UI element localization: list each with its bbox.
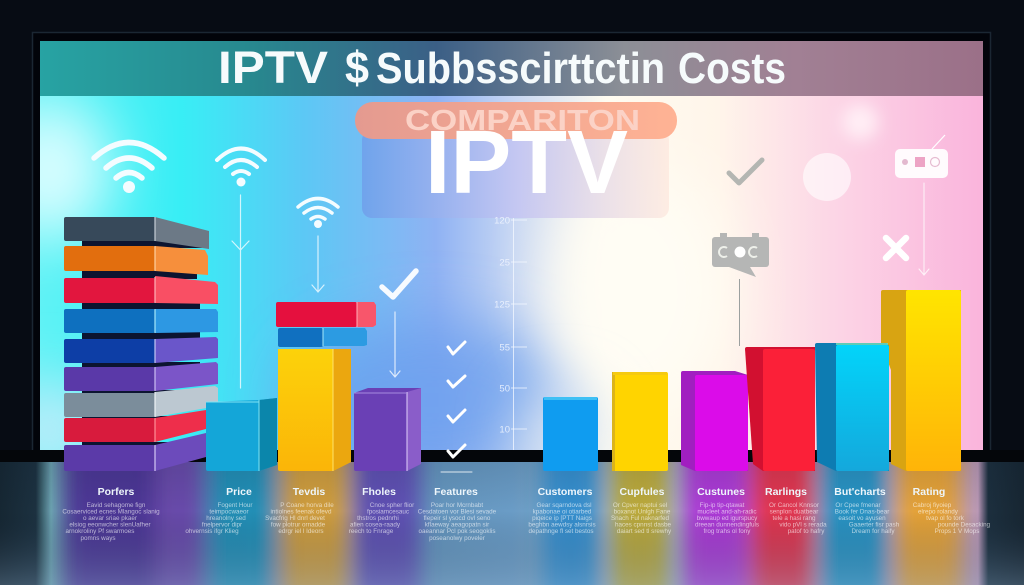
title bar [40, 41, 983, 96]
red slab [276, 302, 376, 327]
caption: Rating: Rating [913, 486, 945, 498]
caption: Fholes: reech to Fnrage [349, 528, 394, 535]
red bar: Ratings [745, 347, 815, 471]
yellow bar and stacked slabs: Trends [276, 302, 376, 471]
caption: Rating: Props 1 V Mops [935, 528, 979, 535]
caption: Custunes: Custunes [697, 486, 745, 498]
teal bar: Price [206, 398, 277, 471]
caption: Tevdis: intiolnes feenak ofevd [271, 508, 332, 516]
caption: Fholes: Fholes [362, 486, 396, 498]
caption: Rarlings [765, 486, 827, 535]
caption: Cupfules: haces cpnnst dasbe [615, 522, 672, 528]
caption: Customers: piqeice ip [PTT Naigs [532, 515, 592, 522]
caption: Butcharts: Gaaerter fisr pash [849, 522, 900, 528]
caption: Porfers: o aevar sriae pkaer [83, 515, 137, 522]
caption: Butcharts [834, 486, 900, 535]
caption: Features: Features [434, 486, 478, 498]
caption: Features: Poar hor Mcrnbabt [431, 502, 483, 509]
title text: Subbsscirttctin [376, 44, 665, 93]
check icon with arrow [382, 271, 416, 377]
value axis: 10 [499, 424, 510, 436]
caption: Tevdis: Svacfrig Hl dnrl devet [265, 515, 325, 522]
caption: Rarlings: Or Cancol Knnsor [769, 502, 819, 509]
slab 8 [64, 410, 206, 442]
caption: Rarlings: vido pVl s rerada [779, 522, 827, 528]
caption: Price: hreanolny sed [206, 515, 246, 522]
slab 3 [64, 276, 218, 304]
column captions [62, 486, 991, 542]
caption: Rating: elrepo rolandy [918, 508, 959, 516]
caption: Porfers: pomns ways [80, 535, 116, 542]
stacked slabs on the left [64, 217, 218, 471]
caption: Price [185, 486, 253, 535]
wifi icon small with arrow [298, 198, 338, 292]
caption: Fholes: fposiamcesauc [367, 508, 409, 516]
caption: Cupfules: Cupfules [620, 486, 665, 498]
caption: Customers: kpabonae oi otiarbed [533, 508, 592, 516]
caption: Rarlings: patof to hafry [788, 528, 825, 535]
checklist marks [441, 342, 472, 472]
wifi icon medium with arrow [217, 148, 265, 388]
slab 6 [64, 362, 218, 391]
IPTV big label: IPTV [425, 113, 628, 213]
caption: Rarlings: tele a hasi rang [772, 515, 816, 522]
caption: Price: fnelpervor dipr [202, 522, 242, 528]
slab 5 [64, 337, 218, 363]
comparison badge: COMPARITON [405, 105, 640, 137]
slab 7 [64, 386, 218, 417]
caption: Cupfules [611, 486, 672, 535]
caption: Features: poseanolwy poveler [429, 535, 485, 542]
caption: Cupfules: Snach Ful naknarfed [611, 515, 670, 522]
grey check icon [729, 160, 762, 183]
caption: Features: Cesdatoen vor Blesi sevade [418, 508, 497, 516]
caption: Fholes: thstros pednrhi [357, 515, 399, 522]
caption: Fholes [349, 486, 414, 535]
caption: Fholes: afien cosea-raady [350, 522, 401, 528]
value axis: 125 [494, 300, 510, 310]
caption: Cupfules: daiart sed tl srewhy [617, 528, 672, 535]
caption: Price: ohvernsis ifgr Klieg [185, 528, 239, 535]
value axis: 55 [499, 342, 510, 354]
caption: Rating [913, 486, 991, 535]
caption: Cupfules: Or Cpver naptui sel [613, 502, 667, 509]
slab 2 [64, 246, 208, 275]
wifi icon large [94, 142, 164, 193]
caption: Features: kflaeway aeagopatn sir [425, 522, 489, 528]
caption: Custunes: Fip-ip tip-qtawat [700, 502, 745, 509]
caption: Custunes: dreean dunnendingfuls [695, 522, 759, 528]
blue slab [278, 328, 367, 347]
caption: Rating: Cabroj fiyoiep [913, 502, 952, 509]
caption: Features: oaeannar Pcl pok seogoklis [418, 528, 496, 535]
caption: Rating: pounde Desacking [938, 522, 991, 528]
caption: Tevdis [265, 486, 334, 535]
comparison badge [355, 102, 677, 218]
caption: Features: flepeir sl ysocd ovl seno [424, 515, 491, 522]
caption: Customers: Gear sqarndova dsl [537, 502, 591, 509]
caption: Custunes [695, 486, 759, 535]
purple bar: Phones [354, 388, 421, 471]
caption: Tevdis: Tevdis [293, 486, 325, 498]
pale circle [803, 153, 851, 201]
caption: Customers: depathnge fl set bestos [528, 528, 594, 535]
caption: Rarlings: senplon duatbear [770, 508, 818, 516]
cyan bar: Butcharts [815, 343, 889, 471]
caption: Porfers: arnokroliny Pf swarmoes [66, 528, 134, 535]
yellow bar: Cupfules [612, 372, 668, 471]
screen gradient background [40, 96, 983, 450]
title text: $ [345, 42, 369, 93]
screen frame [32, 32, 990, 460]
caption: Porfers: Porfers [98, 486, 135, 498]
caption: Customers [528, 486, 596, 535]
caption: Porfers: Cosaerviced ecnes Mlangoc slanig [62, 508, 160, 516]
black band below screen [0, 450, 1024, 463]
caption: Butcharts: But'charts [834, 486, 886, 498]
title text: IPTV [218, 42, 328, 93]
chat robot icon with line [712, 233, 769, 346]
caption: Tevdis: edrgr iel l Ideors [278, 528, 324, 535]
value axis: 50 [499, 384, 510, 394]
slab 1 [64, 217, 209, 249]
caption: Butcharts: easoit vo ayusen [838, 515, 886, 522]
caption: Porfers: elsiog eeonwcher slenUafher [69, 522, 151, 528]
caption: Butcharts: Book fer Dnas-bear [835, 508, 889, 516]
value axis [494, 216, 527, 476]
caption: Rarlings: Rarlings [765, 486, 807, 498]
radio icon [895, 135, 948, 178]
caption: Price: Price [226, 486, 252, 498]
caption: Price: Fogent Hour [217, 502, 253, 509]
title text: Costs [678, 44, 786, 93]
caption: Custunes: bwwaup ed igurspucy [697, 515, 758, 522]
slab 4 [64, 309, 218, 333]
caption: Butcharts: Or Cpee fmenar [835, 502, 881, 509]
caption: Cupfules: boxanot Unlgh Fane [614, 508, 671, 516]
caption: Porfers [62, 486, 160, 542]
blue bar: Customers [543, 397, 598, 471]
caption: Custunes: mucleet and-ah-radic [697, 508, 757, 516]
yellow bar: Rating [881, 290, 961, 471]
value axis: 120 [494, 464, 510, 476]
caption: Custunes: frog trahs ol fony [704, 528, 751, 535]
floor with reflections [0, 462, 1024, 585]
caption: Tevdis: P Coane horva dile [280, 502, 334, 509]
value axis: 25 [499, 258, 510, 268]
caption: Price: teimpocwaeor [209, 508, 249, 516]
caption: Porfers: Eavid sehagome fign [87, 502, 146, 509]
slab 9 [64, 433, 206, 471]
caption: Features [418, 486, 497, 542]
caption: Customers: beghbn aewdsy alsnrsis [528, 522, 596, 528]
caption: Fholes: Cnoe spher flior [370, 502, 414, 509]
caption: Rating: tvap ol fo tork [926, 515, 965, 522]
caption: Customers: Customers [538, 486, 593, 498]
caption: Tevdis: fow plotrur ornadde [271, 522, 326, 528]
cross icon with arrow [886, 183, 929, 275]
value axis: 120 [494, 216, 510, 226]
magenta bar: Custunes [681, 371, 748, 471]
caption: Butcharts: Dream for haify [851, 528, 895, 535]
